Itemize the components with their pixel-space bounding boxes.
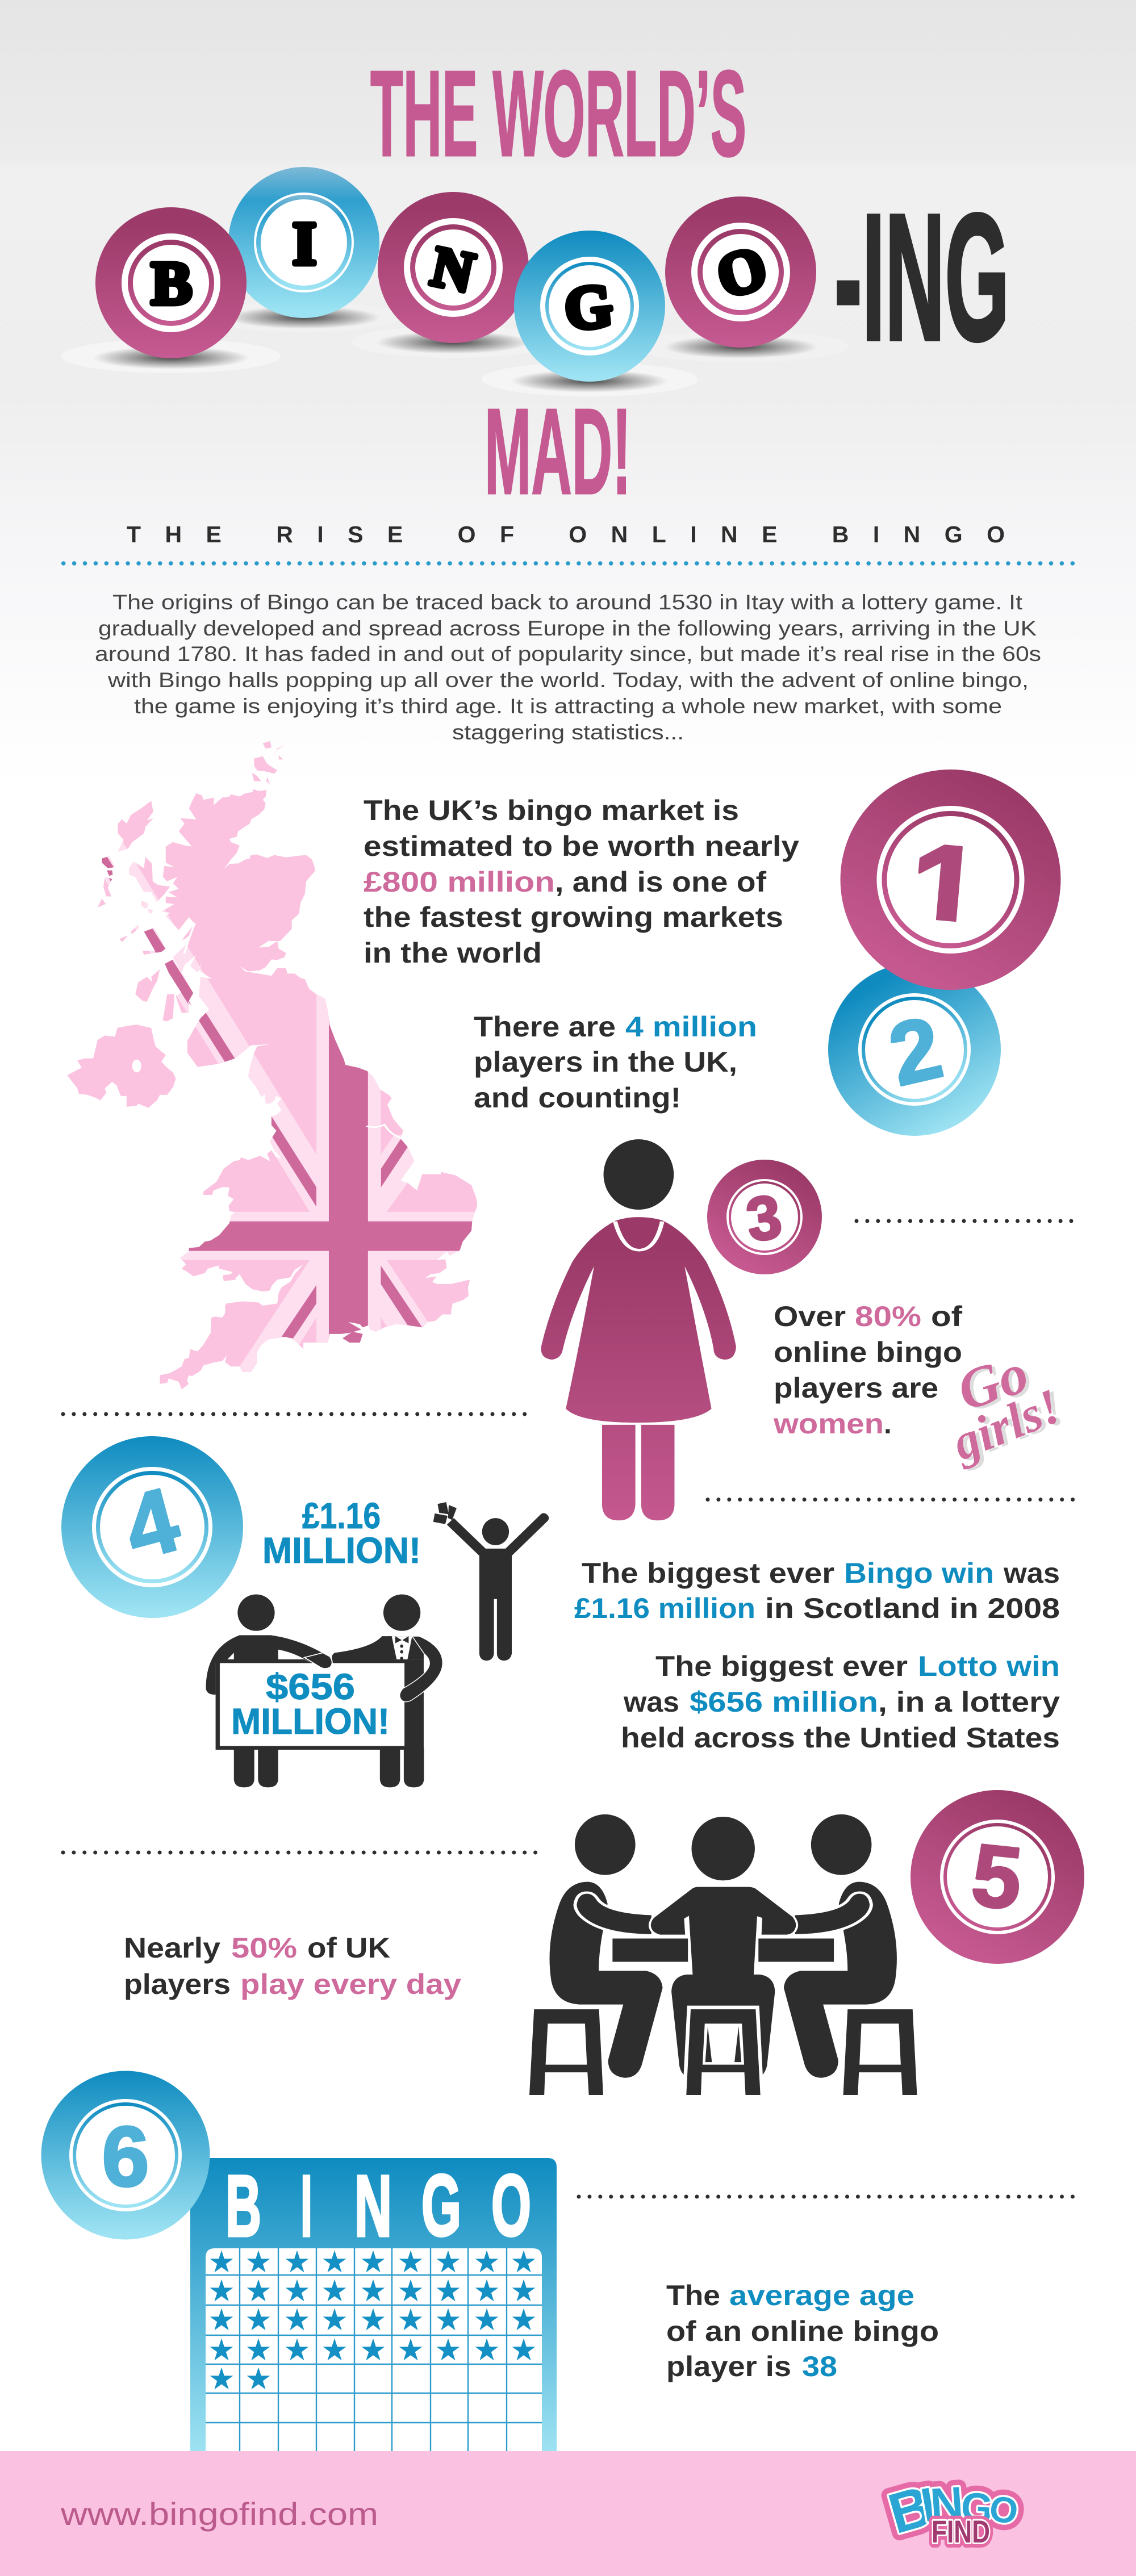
text: 4 million players: and counting!	[474, 1082, 681, 1114]
card heading: I	[300, 2157, 312, 2255]
text: play every day: players	[124, 1968, 231, 2000]
text: market worth: , and is one of	[555, 866, 766, 898]
text: play every day: Nearly	[124, 1932, 220, 1964]
ball: O: O	[710, 233, 774, 311]
blue dotted divider	[64, 561, 1075, 566]
number ball 4: 4	[114, 1468, 189, 1579]
intro paragraph: staggering statistics...	[452, 721, 684, 744]
humber and lough details	[133, 923, 400, 1138]
text: biggest bingo win: in Scotland in 2008	[765, 1592, 1060, 1624]
text: market worth: in the world	[364, 937, 542, 969]
text: women players: Over	[774, 1300, 846, 1332]
intro paragraph: around 1780. It has faded in and out of popularity since, but made it’s real rise in the 60s	[95, 642, 1041, 666]
card heading: B	[225, 2157, 261, 2255]
callout: 1.16 million: £1.16	[302, 1495, 381, 1536]
dotted divider	[63, 1850, 537, 1855]
text: women players: of	[931, 1300, 962, 1332]
card heading: G	[421, 2157, 461, 2254]
uk map with union jack	[67, 741, 477, 1389]
subtitle: THE RISE OF ONLINE BINGO	[127, 521, 1005, 547]
text: biggest bingo win: The biggest ever	[582, 1557, 834, 1589]
text: MAD!	[485, 383, 631, 520]
number ball 1: 1	[903, 815, 988, 968]
script: go girls: Go	[954, 1343, 1039, 1424]
logo word: bingo: N	[929, 2477, 965, 2530]
logo word: find: FIND	[932, 2514, 990, 2549]
text: women players: .	[884, 1408, 892, 1440]
ball: G: G	[561, 271, 616, 344]
text: biggest lotto win: Lotto win	[918, 1650, 1060, 1682]
centre player	[650, 1886, 797, 2077]
number ball 6: 6	[102, 2109, 149, 2204]
right player	[784, 1882, 897, 2078]
text: average age: The	[666, 2280, 720, 2311]
script: go girls: Go	[950, 1341, 1035, 1423]
logo word: bingo: G	[959, 2484, 995, 2532]
text: biggest bingo win	[574, 1557, 1060, 1624]
logo word: bingo: G	[959, 2484, 995, 2532]
text: biggest bingo win: £1.16 million	[574, 1592, 755, 1624]
number ball 6	[41, 2071, 210, 2240]
text: market worth	[364, 794, 799, 969]
text: biggest lotto win: $656 million	[690, 1686, 878, 1718]
text: women players: players are	[774, 1372, 938, 1404]
callout: 1.16 million: MILLION!	[262, 1530, 421, 1571]
ball: O	[665, 196, 816, 348]
text: 4 million players: players in the UK,	[474, 1046, 737, 1078]
intro paragraph	[95, 591, 1041, 744]
callout: 1.16 million	[262, 1495, 421, 1571]
text: biggest lotto win: , in a lottery	[878, 1686, 1060, 1718]
intro paragraph: The origins of Bingo can be traced back to around 1530 in Itay with a lottery game. It	[112, 591, 1023, 614]
ball: G	[514, 231, 665, 382]
dotted divider	[857, 1219, 1075, 1223]
ball: N: N	[426, 235, 479, 304]
text: 4 million players: 4 million	[625, 1011, 757, 1043]
text: market worth: £800 million	[364, 866, 555, 898]
ball: B	[95, 207, 247, 358]
dotted divider	[63, 1412, 528, 1416]
logo word: bingo: O	[987, 2487, 1021, 2532]
text: play every day: 50%	[231, 1932, 297, 1964]
icon: woman	[541, 1139, 736, 1520]
text: 4 million players	[474, 1011, 757, 1114]
text: average age	[666, 2280, 939, 2382]
ball shadows	[61, 302, 849, 396]
text: biggest lotto win: was	[623, 1686, 679, 1718]
number ball 2: 2	[880, 998, 950, 1105]
text: average age: 38	[802, 2351, 837, 2382]
left player	[550, 1882, 663, 2078]
icons: people	[206, 1502, 549, 1787]
ball: N	[378, 192, 529, 343]
ball: B: B	[151, 250, 192, 317]
number ball 4	[61, 1436, 243, 1618]
logo word: bingo: B	[882, 2474, 939, 2546]
text: play every day	[124, 1932, 461, 2000]
number ball 5	[911, 1790, 1084, 1964]
bingo balls	[61, 167, 849, 396]
icon: two men with sign	[206, 1594, 442, 1787]
card heading	[225, 2157, 531, 2255]
intro paragraph: with Bingo halls popping up all over the world. Today, with the advent of online bingo,	[107, 668, 1029, 692]
footer band	[0, 2451, 1136, 2576]
number ball 3	[707, 1160, 822, 1274]
card stars	[210, 2250, 535, 2389]
text: average age: average age	[729, 2280, 914, 2311]
text: biggest lotto win	[621, 1650, 1060, 1754]
logo word: bingo: N	[929, 2477, 965, 2530]
text: biggest lotto win: The biggest ever	[655, 1650, 908, 1682]
text: biggest lotto win: held across the Untied States	[621, 1722, 1060, 1754]
number ball 2	[828, 963, 1001, 1136]
text: play every day: of UK	[307, 1932, 390, 1964]
icon: cheering man	[433, 1502, 549, 1661]
intro paragraph: the game is enjoying it’s third age. It is attracting a whole new market, with some	[134, 695, 1002, 718]
text: play every day: play every day	[240, 1968, 461, 2000]
card grid	[206, 2248, 542, 2451]
logo word: bingo: I	[917, 2477, 939, 2532]
logo: bingo find	[882, 2474, 1021, 2549]
logo word: bingo: O	[987, 2487, 1021, 2532]
text: market worth: the fastest growing markets	[364, 901, 783, 933]
script: go girls	[943, 1340, 1072, 1474]
footer url: www.bingofind.com	[60, 2496, 378, 2532]
logo word: find: FIND	[932, 2514, 990, 2549]
text: market worth: The UK’s bingo market is	[364, 794, 739, 826]
sign text: 656 million: $656	[266, 1666, 355, 1707]
text: women players: online bingo	[774, 1336, 962, 1368]
text: market worth: estimated to be worth nearly	[364, 830, 799, 862]
dotted divider	[708, 1498, 1075, 1502]
script: go girls: girls!	[948, 1380, 1072, 1473]
script: go girls: girls!	[943, 1378, 1068, 1471]
table	[612, 1939, 834, 1962]
card heading: O	[491, 2157, 531, 2254]
icon: three seated players	[529, 1814, 917, 2095]
text: average age: player is	[666, 2351, 791, 2382]
number ball 1	[841, 770, 1061, 990]
ball: I: I	[293, 210, 316, 278]
card heading: N	[354, 2157, 392, 2255]
background	[0, 0, 1136, 784]
logo word: bingo: I	[917, 2477, 939, 2532]
sign text: 656 million	[231, 1666, 390, 1742]
stools	[529, 2009, 917, 2095]
dotted divider	[579, 2194, 1075, 2199]
intro paragraph: gradually developed and spread across Europe in the following years, arriving in the UK	[98, 617, 1037, 640]
ball: I	[228, 167, 379, 318]
number ball 5: 5	[967, 1825, 1026, 1928]
logo word: bingo	[882, 2474, 1021, 2546]
text: women players: women	[773, 1408, 884, 1440]
number ball 3: 3	[742, 1181, 786, 1254]
sign text: 656 million: MILLION!	[231, 1701, 390, 1742]
bingo card	[190, 2157, 557, 2451]
text: biggest bingo win: was	[1003, 1557, 1060, 1589]
text: women players: 80%	[855, 1300, 921, 1332]
logo word: bingo: B	[882, 2474, 939, 2546]
text: average age: of an online bingo	[666, 2315, 939, 2347]
text: 4 million players: There are	[474, 1011, 616, 1043]
text: biggest bingo win: Bingo win	[844, 1557, 994, 1589]
text: women players	[773, 1300, 962, 1440]
